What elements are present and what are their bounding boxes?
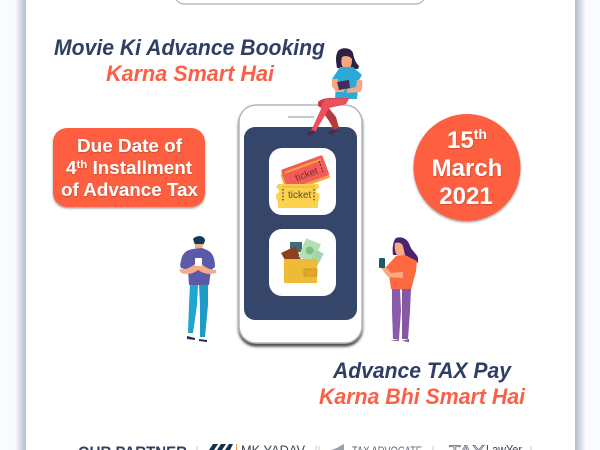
figure: woman with phone [379, 237, 418, 342]
logo: MK Yadav [209, 442, 306, 450]
callout: due date: 4 [66, 158, 76, 178]
callout: date circle: 2021 [439, 183, 493, 210]
callout: due date: Due Date of [77, 136, 183, 156]
callout: due date [53, 128, 205, 207]
callout: due date: th [76, 159, 88, 171]
icon: tickets [269, 148, 336, 215]
partner footer [78, 442, 531, 450]
callout: due date: Installment [87, 158, 192, 178]
icon: tickets: ticket [288, 190, 312, 201]
heading: movie booking: Karna Smart Hai [106, 61, 275, 86]
figure: woman sitting on phone [307, 48, 362, 136]
callout: date circle: th [474, 126, 487, 142]
callout: date circle: March [432, 155, 502, 182]
icon: wallet [269, 229, 336, 296]
heading: movie booking: Movie Ki Advance Booking [54, 35, 326, 60]
icon: tickets: ticket [294, 166, 320, 184]
figure: man with phone [179, 236, 216, 342]
heading: movie booking [54, 35, 326, 86]
heading: advance tax [319, 358, 526, 409]
phone [239, 105, 362, 343]
heading: advance tax: Karna Bhi Smart Hai [319, 384, 526, 409]
callout: date circle [414, 114, 520, 221]
logo: Tax Lawyer [449, 442, 523, 450]
logo: Tax Advocate [331, 444, 422, 450]
callout: date circle: 15 [447, 127, 474, 154]
heading: advance tax: Advance TAX Pay [332, 358, 513, 383]
callout: due date: of Advance Tax [61, 180, 198, 200]
top pill button [175, 0, 425, 4]
